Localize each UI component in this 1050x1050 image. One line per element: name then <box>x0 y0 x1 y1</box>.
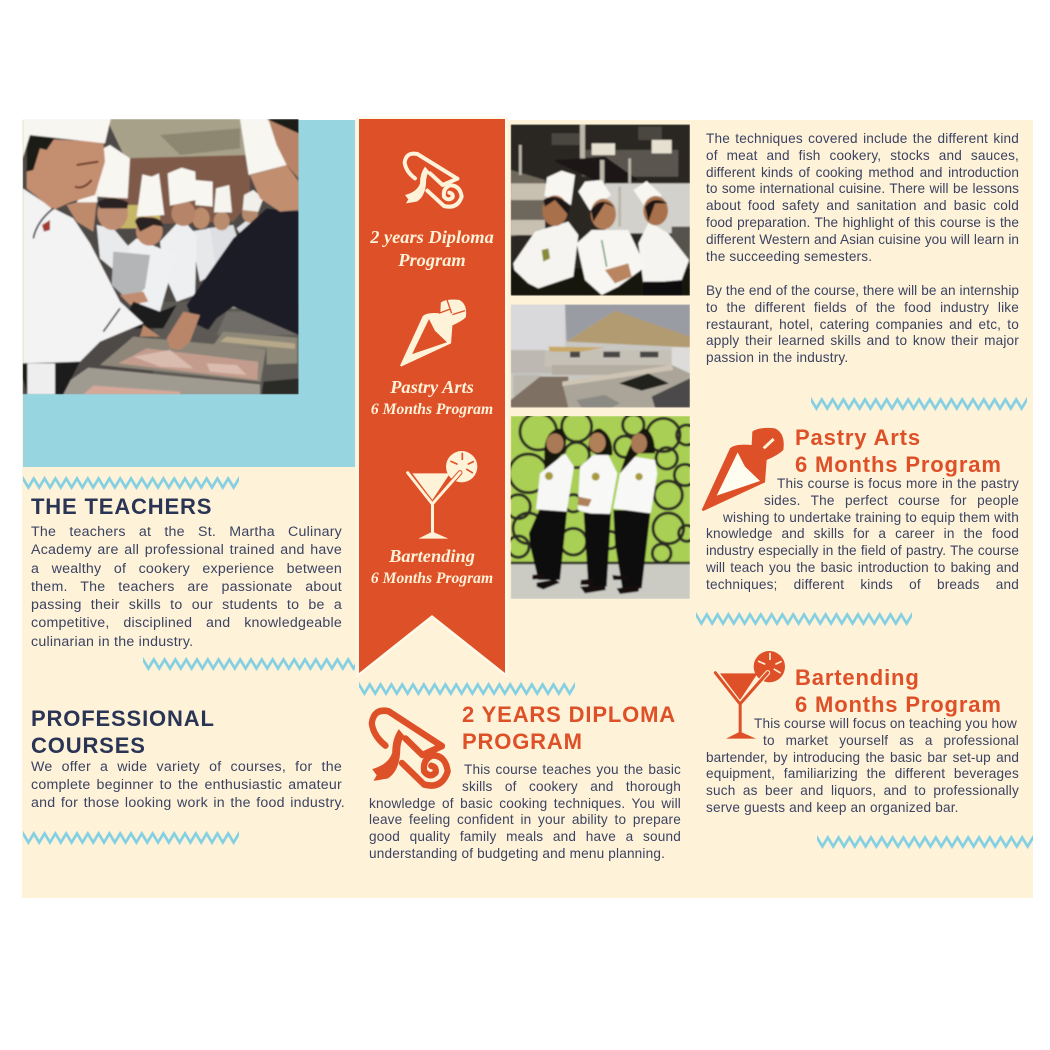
heading: 2 Years Diploma Program <box>462 702 676 754</box>
text: teachers description: a wealthy of cookery experience between <box>31 561 342 577</box>
dark floor under students <box>130 301 176 329</box>
text: teachers description: them. The teachers are passionate about <box>31 579 342 595</box>
icon: diploma scroll <box>405 154 462 207</box>
text: diploma description <box>369 762 681 861</box>
photo: three students against green wall <box>506 412 697 599</box>
text: professional courses description: We offer a wide variety of courses, for the <box>31 759 342 775</box>
text: diploma description: skills of cookery and thorough <box>462 779 681 794</box>
heading: Bartending <box>795 665 1002 717</box>
photo: chefs around a tray <box>23 119 299 394</box>
text: course techniques: the succeeding semesters. <box>706 249 872 264</box>
heading: Pastry Arts <box>795 425 1002 477</box>
text: bartending description: serve guests and keep an organized bar. <box>706 800 959 815</box>
text: bartending description: to market yourself as a professional <box>763 733 1019 748</box>
panel: cream background <box>22 120 1033 898</box>
banner label: 2 years Diploma: 2 years Diploma <box>370 227 494 247</box>
icon: martini <box>408 451 477 539</box>
text: bartending description: bartender, by introducing the basic bar set-up and <box>706 750 1019 765</box>
lead chef <box>23 188 143 363</box>
text: diploma description: knowledge of basic cooking techniques. You will <box>369 796 681 811</box>
banner label: 2 years Diploma <box>370 227 494 270</box>
icon: piping bag <box>400 300 466 366</box>
text: pastry description: sides. The perfect course for people <box>764 493 1019 508</box>
heading: Pastry Arts: Pastry Arts <box>795 425 921 450</box>
instructor dark jacket <box>187 208 299 335</box>
student 2 <box>588 428 612 457</box>
banner label: 2 years Diploma: Program <box>398 250 466 270</box>
heading: Pastry Arts: 6 Months Program <box>795 452 1002 477</box>
chef 1 <box>513 222 578 288</box>
chef 2 <box>577 230 646 295</box>
text: course techniques: different Western and Asian cuisine you will learn in <box>706 232 1019 247</box>
text: internship: By the end of the course, there will be an internship <box>706 283 1019 298</box>
banner label: Pastry Arts <box>371 377 493 418</box>
text: diploma description: understanding of budgeting and menu planning. <box>369 846 665 861</box>
banner label: Bartending: Bartending <box>389 546 475 566</box>
trays <box>100 337 266 382</box>
heading: The Teachers: THE TEACHERS <box>31 494 212 519</box>
text: course techniques: to some international cuisine. There will be lessons <box>706 181 1019 196</box>
heading: 2 Years Diploma Program: PROGRAM <box>462 729 583 754</box>
text: pastry description: will teach you the basic introduction to baking and <box>706 560 1019 575</box>
text: diploma description: good quality family meals and have a sound <box>369 829 681 844</box>
text: teachers description: culinarian in the industry. <box>31 634 193 650</box>
photo: training kitchen <box>511 304 690 408</box>
heading: 2 Years Diploma Program: 2 YEARS DIPLOMA <box>462 702 676 727</box>
photo: three chefs with arms crossed <box>511 124 690 296</box>
text: teachers description <box>31 524 342 650</box>
text: internship <box>706 283 1019 365</box>
icon: orange diploma scroll <box>372 711 448 786</box>
banner label: Pastry Arts: 6 Months Program <box>371 401 493 418</box>
heading: Professional Courses: COURSES <box>31 733 146 758</box>
banner label: Bartending <box>371 546 493 587</box>
text: pastry description: knowledge and skills for a career in the food <box>706 526 1019 541</box>
panel: blue backing block <box>23 120 355 467</box>
text: teachers description: The teachers at the St. Martha Culinary <box>31 524 342 540</box>
icon: orange piping bag <box>702 428 784 511</box>
text: bartending description: equipment, familiarizing the different beverages <box>706 766 1019 781</box>
text: internship: to the different fields of the food industry like <box>706 300 1019 315</box>
text: teachers description: passing their skills to our students to be a <box>31 597 342 613</box>
text: pastry description: wishing to undertake training to equip them with <box>723 510 1019 525</box>
banner label: Bartending: 6 Months Program <box>371 570 493 587</box>
heading: Bartending: 6 Months Program <box>795 692 1002 717</box>
text: internship: restaurant, hotel, catering companies and etc, to <box>706 317 1019 332</box>
heading: Professional Courses <box>31 706 215 758</box>
text: bartending description: such as beer and liquors, and to professionally <box>706 783 1019 798</box>
text: teachers description: Academy are all professional trained and have <box>31 542 342 558</box>
text: pastry description: This course is focus more in the pastry <box>777 476 1019 491</box>
text: course techniques: The techniques covered include the different kind <box>706 131 1019 146</box>
text: bartending description <box>706 716 1019 815</box>
text: course techniques <box>706 131 1019 264</box>
banner label: Pastry Arts: Pastry Arts <box>390 377 474 397</box>
text: course techniques: of meat and fish cookery, stocks and sauces, <box>706 148 1019 163</box>
chef 3 <box>638 222 689 283</box>
heading: Professional Courses: PROFESSIONAL <box>31 706 215 731</box>
ribbon banner <box>359 119 505 673</box>
text: bartending description: This course will focus on teaching you how <box>754 716 1017 731</box>
text: diploma description: leave feeling confident in your ability to prepare <box>369 812 681 827</box>
heading: Bartending: Bartending <box>795 665 920 690</box>
text: pastry description: techniques; different kinds of breads and <box>706 577 1019 592</box>
student 3 <box>620 428 655 473</box>
background students <box>236 220 252 234</box>
text: pastry description: industry especially in the field of pastry. The course <box>706 543 1019 558</box>
text: course techniques: food preparation. The highlight of this course is the <box>706 215 1019 230</box>
text: internship: apply their learned skills and to know their major <box>706 333 1019 348</box>
student 1 <box>544 428 566 475</box>
text: professional courses description <box>31 759 345 811</box>
text: professional courses description: complete beginner to the enthusiastic amateur <box>31 777 342 793</box>
text: professional courses description: and for those looking work in the food industry. <box>31 795 345 811</box>
text: diploma description: This course teaches you the basic <box>464 762 681 777</box>
text: teachers description: competitive, disciplined and knowledgeable <box>31 615 342 631</box>
text: course techniques: about food safety and sanitation and basic cold <box>706 198 1019 213</box>
icon: orange martini <box>715 651 785 739</box>
text: course techniques: different kinds of cooking method and introduction <box>706 165 1019 180</box>
text: internship: passion in the industry. <box>706 350 848 365</box>
text: pastry description <box>706 476 1019 592</box>
